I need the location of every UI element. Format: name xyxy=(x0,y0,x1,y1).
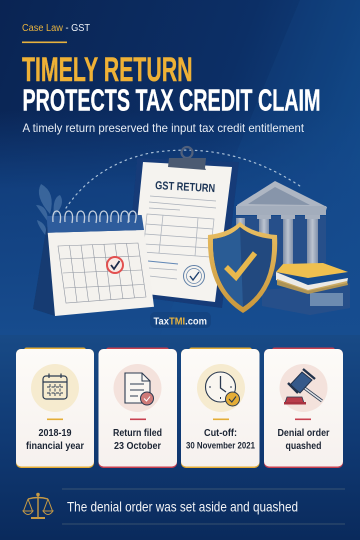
courthouse xyxy=(236,181,327,276)
form heading: GST RETURN xyxy=(155,180,215,195)
title: TIMELY RETURN xyxy=(22,51,192,89)
shield xyxy=(208,222,277,313)
category label: Case Law - GST xyxy=(22,23,90,34)
calendar xyxy=(33,211,154,316)
binding rings xyxy=(53,211,136,223)
card 2: return filed xyxy=(98,348,177,468)
conclusion rules xyxy=(62,489,345,524)
card 4: denial quashed xyxy=(264,348,343,468)
leaves xyxy=(36,184,62,236)
brand: TaxTMI.com xyxy=(154,316,207,328)
card 2: return filed: Return filed xyxy=(113,427,162,439)
clip xyxy=(182,147,192,158)
icon: gavel xyxy=(280,364,328,412)
card 1: financial year: 2018-19 xyxy=(38,427,72,439)
conclusion text: The denial order was set aside and quashed xyxy=(67,498,298,514)
dotted arc xyxy=(66,150,300,208)
card 1: financial year xyxy=(16,348,94,468)
icon: scales of justice xyxy=(23,493,53,518)
clipboard xyxy=(125,147,239,308)
accent rule xyxy=(22,42,67,43)
card 3: cut-off: Cut-off: xyxy=(204,427,237,439)
card 2: return filed: 23 October xyxy=(114,440,161,452)
date marker xyxy=(107,257,123,273)
card 3: cut-off xyxy=(181,348,260,468)
icon: clock xyxy=(197,364,245,412)
subtitle: A timely return preserved the input tax credit entitlement xyxy=(22,121,305,135)
title xyxy=(22,51,320,118)
brand xyxy=(150,312,211,328)
card 4: denial quashed: quashed xyxy=(286,440,322,452)
icon: document xyxy=(114,364,162,412)
card 1: financial year: financial year xyxy=(26,440,84,452)
stamp xyxy=(184,266,204,286)
icon: calendar xyxy=(31,364,79,412)
document stack xyxy=(262,263,350,315)
card 3: cut-off: 30 November 2021 xyxy=(186,440,256,452)
card 4: denial quashed: Denial order xyxy=(278,427,330,439)
